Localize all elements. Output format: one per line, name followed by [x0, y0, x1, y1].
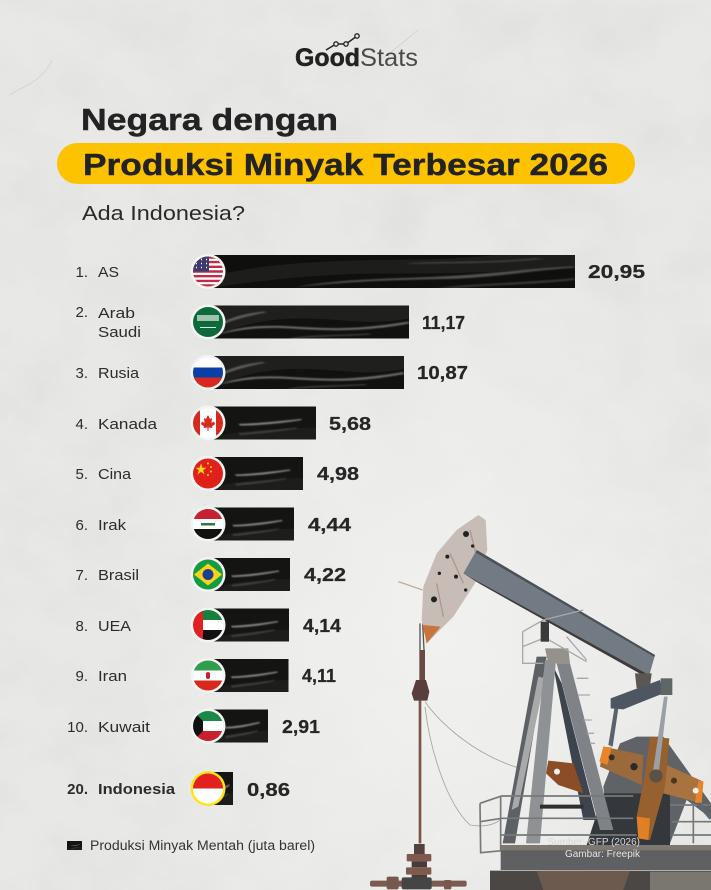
row 1: AS: AS: [98, 264, 119, 281]
row 7: Brasil: 7.: [75, 567, 88, 584]
row 10: Kuwait: 10.: [67, 719, 88, 736]
illustration: oil pumpjack: [370, 515, 711, 890]
title line 1: Negara dengan: [81, 102, 338, 137]
row 7: Brasil: 4,22: [304, 564, 346, 585]
wellhead and rod: [370, 582, 517, 889]
row 6: Irak: 4,44: [308, 514, 352, 535]
row 2: Arab Saudi: [75, 304, 465, 341]
row 20: Indonesia: 0,86: [247, 779, 290, 800]
row 4: Kanada: 5,68: [329, 413, 371, 434]
row 20: Indonesia: [67, 771, 290, 806]
row 3: Rusia: [75, 355, 468, 390]
row 7: Brasil: Brasil: [98, 567, 139, 584]
logo: GoodStats: Stats: [360, 44, 418, 72]
row 3: Rusia: 3.: [75, 365, 88, 382]
row 2: Arab Saudi: Arab: [98, 305, 135, 322]
row 10: Kuwait: 2,91: [282, 716, 320, 737]
row 5: Cina: 4,98: [317, 463, 359, 484]
row 5: Cina: [75, 456, 359, 491]
row 5: Cina: 5.: [75, 466, 88, 483]
row 9: Iran: [75, 658, 336, 693]
bar chart: [67, 254, 645, 806]
highlighted title pill: Produksi Minyak Terbesar 2026: [83, 147, 608, 182]
row 8: UEA: 4,14: [303, 615, 342, 636]
row 4: Kanada: 4.: [75, 416, 88, 433]
subtitle: Ada Indonesia?: [82, 203, 245, 225]
row 9: Iran: 9.: [75, 668, 88, 685]
row 1: AS: 20,95: [588, 261, 645, 282]
row 2: Arab Saudi: 11,17: [422, 312, 465, 333]
logo: GoodStats: Good: [295, 44, 360, 72]
row 8: UEA: 8.: [75, 618, 88, 635]
legend: Produksi Minyak Mentah (juta barel): [90, 838, 315, 853]
row 2: Arab Saudi: 2.: [75, 304, 88, 321]
row 2: Arab Saudi: Saudi: [98, 324, 141, 341]
row 8: UEA: [75, 608, 342, 642]
row 7: Brasil: [75, 557, 346, 592]
horsehead: [422, 515, 487, 643]
row 4: Kanada: Kanada: [98, 416, 158, 433]
source credit: Sumber: GFP (2026): [547, 837, 640, 848]
row 10: Kuwait: [67, 708, 320, 744]
legs: [503, 610, 613, 843]
row 5: Cina: Cina: [98, 466, 132, 483]
row 8: UEA: UEA: [98, 618, 131, 635]
row 6: Irak: 6.: [75, 517, 88, 534]
source credit: [547, 837, 641, 860]
row 20: Indonesia: 20.: [67, 781, 88, 798]
crank backdrop and gearbox: [587, 737, 711, 845]
crank and counterweights: [546, 673, 703, 840]
row 6: Irak: [75, 506, 352, 542]
row 20: Indonesia: Indonesia: [98, 781, 176, 798]
row 4: Kanada: [75, 406, 371, 440]
row 3: Rusia: 10,87: [417, 362, 468, 383]
row 1: AS: [75, 254, 645, 289]
row 3: Rusia: Rusia: [98, 365, 140, 382]
row 9: Iran: 4,11: [302, 665, 336, 686]
row 6: Irak: Irak: [98, 517, 127, 534]
safety railing: [480, 796, 711, 853]
row 10: Kuwait: Kuwait: [98, 719, 151, 736]
logo: GoodStats: [295, 34, 418, 72]
row 1: AS: 1.: [75, 264, 88, 281]
source credit: Gambar: Freepik: [565, 849, 641, 860]
row 9: Iran: Iran: [98, 668, 127, 685]
walking beam: [463, 550, 655, 678]
base platform: [490, 845, 711, 890]
highlighted title pill: [57, 143, 635, 184]
